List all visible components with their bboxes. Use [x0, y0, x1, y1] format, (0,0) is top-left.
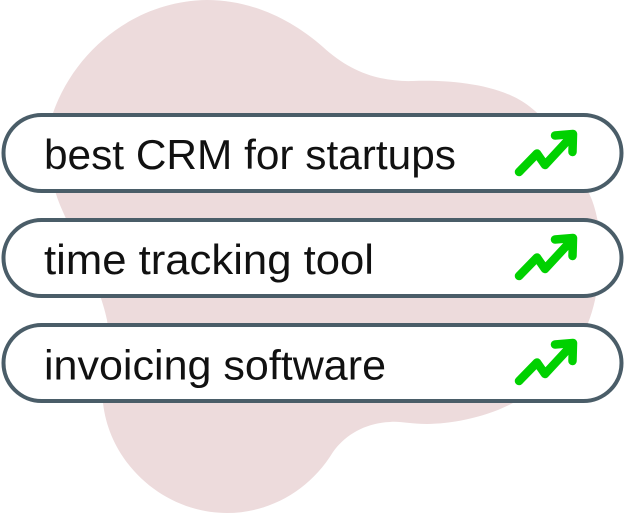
row: best CRM for startups: [4, 115, 622, 191]
row: time tracking tool: [4, 220, 622, 296]
icon: trending up arrow: [519, 238, 573, 276]
pill outline: [4, 325, 622, 401]
pill outline: [4, 115, 622, 191]
icon: trending up arrow: [519, 343, 573, 381]
pill outline: [4, 220, 622, 296]
icon: trending up arrow: [519, 134, 573, 172]
keyword text: best CRM for startups: [44, 131, 456, 178]
keyword text: invoicing software: [44, 342, 386, 388]
keyword text: time tracking tool: [44, 236, 374, 283]
row: invoicing software: [4, 325, 622, 401]
